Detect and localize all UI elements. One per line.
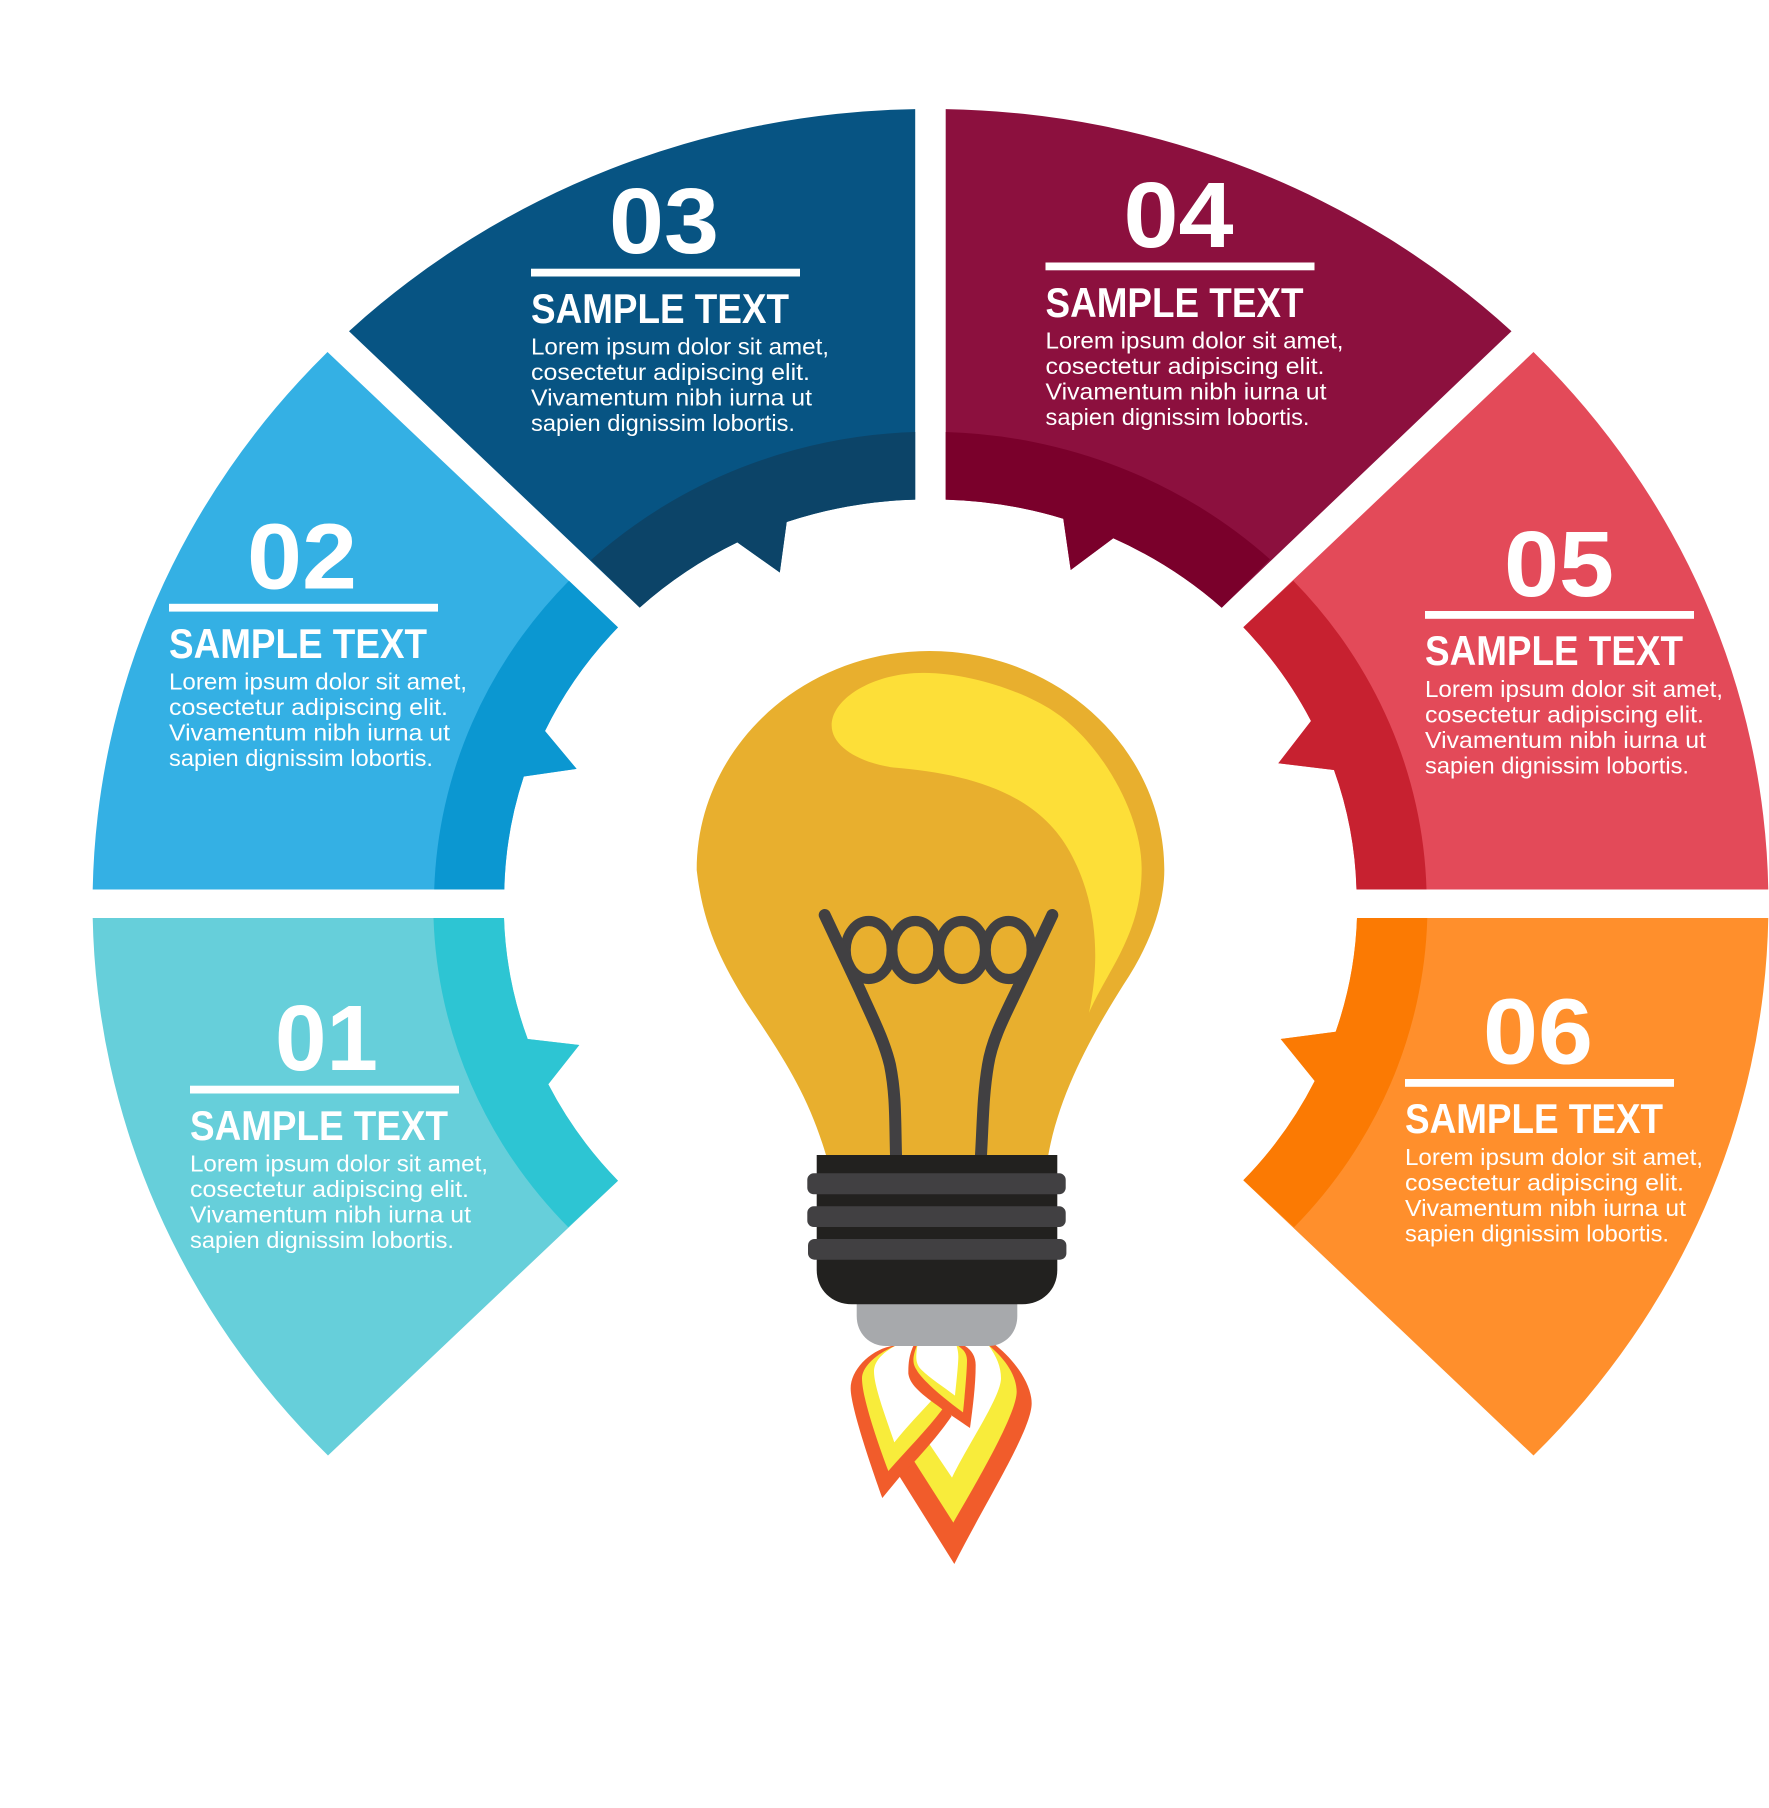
body text 02 — [169, 668, 467, 771]
icon: bulb glass and filament — [697, 651, 1164, 1155]
segment 06 background — [1243, 918, 1768, 1456]
body text 04: sapien dignissim lobortis. — [1046, 404, 1310, 430]
body text 01 — [190, 1151, 488, 1253]
panel: 01 — [93, 918, 618, 1456]
segment 01 background — [93, 918, 618, 1456]
icon: screw ribs — [807, 1173, 1066, 1260]
body text 03: Lorem ipsum dolor sit amet, — [531, 334, 829, 360]
panel: 04 — [946, 109, 1512, 608]
body text 02: Lorem ipsum dolor sit amet, — [169, 668, 467, 694]
body text 01: Lorem ipsum dolor sit amet, — [190, 1151, 488, 1177]
body text 02: cosectetur adipiscing elit. — [169, 694, 448, 720]
segment 03 background — [349, 109, 915, 608]
number 06: 06 — [1483, 980, 1593, 1084]
body text 01: Vivamentum nibh iurna ut — [190, 1202, 471, 1228]
number 02: 02 — [247, 504, 357, 608]
body text 05 — [1425, 676, 1723, 778]
rule 01 — [190, 1086, 459, 1094]
segment 05 background — [1243, 352, 1768, 890]
heading 02: SAMPLE TEXT — [169, 620, 427, 667]
body text 04 — [1046, 328, 1344, 430]
body text 06: cosectetur adipiscing elit. — [1405, 1170, 1684, 1196]
rule 03 — [531, 269, 800, 276]
body text 05: sapien dignissim lobortis. — [1425, 752, 1689, 778]
segment 04 background — [946, 109, 1512, 608]
body text 01: sapien dignissim lobortis. — [190, 1227, 454, 1253]
segment 04 inner band — [946, 432, 1270, 608]
body text 05: Vivamentum nibh iurna ut — [1425, 727, 1706, 753]
body text 05: cosectetur adipiscing elit. — [1425, 702, 1704, 728]
number 01: 01 — [275, 986, 378, 1090]
heading 01: SAMPLE TEXT — [190, 1102, 448, 1149]
body text 02: Vivamentum nibh iurna ut — [169, 719, 450, 745]
body text 04: Lorem ipsum dolor sit amet, — [1046, 328, 1344, 354]
body text 06: Vivamentum nibh iurna ut — [1405, 1195, 1686, 1221]
rule 02 — [169, 604, 438, 612]
segment 05 inner band — [1243, 581, 1426, 890]
number 05: 05 — [1504, 512, 1614, 616]
segment 02 inner band — [434, 581, 618, 890]
icon: black screw base — [817, 1155, 1057, 1304]
number 04: 04 — [1124, 163, 1234, 267]
body text 03: sapien dignissim lobortis. — [531, 410, 795, 436]
heading 06: SAMPLE TEXT — [1405, 1095, 1663, 1142]
body text 02: sapien dignissim lobortis. — [169, 745, 433, 771]
heading 04: SAMPLE TEXT — [1046, 279, 1304, 326]
rule 06 — [1405, 1079, 1674, 1087]
rule 05 — [1425, 611, 1694, 619]
body text 03 — [531, 334, 829, 436]
body text 03: cosectetur adipiscing elit. — [531, 359, 810, 385]
panel: 06 — [1243, 918, 1768, 1456]
heading 03: SAMPLE TEXT — [531, 285, 789, 332]
body text 04: Vivamentum nibh iurna ut — [1046, 378, 1327, 404]
segment 06 inner band — [1243, 918, 1427, 1227]
panel: 05 — [1243, 352, 1768, 890]
icon: rocket light bulb — [697, 651, 1164, 1564]
icon: gray bulb tip — [857, 1296, 1017, 1346]
body text 03: Vivamentum nibh iurna ut — [531, 385, 812, 411]
segment 02 background — [93, 352, 618, 890]
body text 04: cosectetur adipiscing elit. — [1046, 353, 1324, 379]
body text 01: cosectetur adipiscing elit. — [190, 1176, 469, 1202]
segment 03 inner band — [591, 432, 915, 608]
body text 06: Lorem ipsum dolor sit amet, — [1405, 1144, 1703, 1170]
rule 04 — [1046, 262, 1314, 270]
body text 06 — [1405, 1144, 1703, 1246]
body text 05: Lorem ipsum dolor sit amet, — [1425, 676, 1723, 702]
panel: 02 — [93, 352, 618, 890]
panel: 03 — [349, 109, 915, 608]
body text 06: sapien dignissim lobortis. — [1405, 1220, 1669, 1246]
icon: rocket flames — [851, 1343, 1032, 1564]
segment 01 inner band — [434, 918, 618, 1227]
number 03: 03 — [609, 169, 719, 273]
heading 05: SAMPLE TEXT — [1425, 627, 1683, 674]
